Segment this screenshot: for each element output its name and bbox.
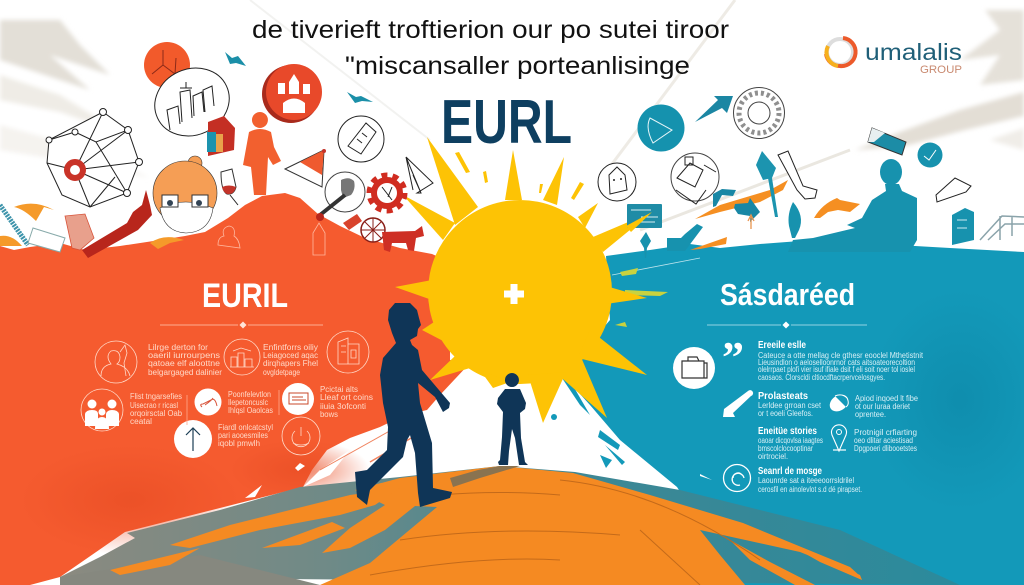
- text block: mouse feature: oprentee.: [855, 410, 886, 419]
- icon: wrench circle: [316, 172, 365, 221]
- icon: group of people: [81, 389, 123, 431]
- icon: two people: [95, 341, 137, 383]
- text block: Prolasteats: [758, 391, 822, 418]
- icon: steel bridge: [980, 216, 1024, 240]
- icon: face tag circle: [598, 163, 636, 201]
- icon: wheel cart: [361, 218, 424, 252]
- heading: EURIL: EURIL: [202, 277, 288, 315]
- icon: books: [207, 116, 235, 156]
- text block two: [263, 343, 318, 377]
- text block one: qatoae elf aloottne: [148, 359, 221, 368]
- icon: tree: [640, 232, 651, 258]
- icon: middle umbrella: [150, 237, 184, 249]
- orange stroke lower: [690, 237, 727, 250]
- logo: GROUP: [920, 64, 962, 76]
- icon: heart circle: [638, 104, 684, 152]
- icon: teal kite: [756, 151, 778, 217]
- icon: white circle with loop: [194, 388, 222, 416]
- text block four: Poonfelevtlon: [228, 390, 271, 399]
- text block five: bows: [320, 410, 338, 419]
- text block: Eneitue stories: oirtrociel.: [758, 452, 788, 461]
- icon: paper tool: [778, 151, 817, 199]
- text block two: ovgldetpage: [263, 368, 300, 377]
- text block five: iiuia 3ofconti: [320, 402, 366, 411]
- arrow: teal pointer: [695, 96, 733, 122]
- text block: Eneitue stories: [758, 426, 823, 461]
- text block four: Ilepetoncuslc: [228, 398, 268, 407]
- icon: document circle: [338, 116, 384, 162]
- icon: wine glass: [221, 169, 238, 205]
- text block: Eneitue stories: Eneitüe stories: [758, 426, 817, 437]
- text block six: iqobl pmwlh: [218, 439, 260, 448]
- column divider two: [278, 390, 280, 415]
- icon: teal arrow: [713, 189, 760, 222]
- text block: pin feature: [854, 428, 917, 453]
- icon: red branch circle: [144, 42, 190, 88]
- small man silhouette: [497, 373, 528, 465]
- text block two: dirqhapers Fhel: [263, 359, 318, 368]
- icon: white circle with arrow: [174, 420, 212, 458]
- icon: power circle: [282, 417, 320, 455]
- icon: gear: [369, 175, 405, 211]
- icon: paper plane: [406, 157, 433, 193]
- icon: skyline medallion: [144, 56, 240, 148]
- text block: Eneitue stories: bmscolclocooptinar: [758, 444, 813, 453]
- orange stroke: [695, 180, 788, 219]
- text block: mouse feature: ot our luraa deriet: [855, 402, 911, 411]
- text block five: Lleaf ort coins: [320, 393, 373, 402]
- icon: triangle flag: [285, 149, 326, 187]
- text block: Prolasteats: Prolasteats: [758, 391, 808, 402]
- icon: outline ticket: [936, 178, 971, 202]
- icon: tilted card: [868, 128, 906, 155]
- icon: quotation marks: ”: [722, 333, 744, 382]
- icon: map pin: [832, 425, 846, 451]
- text block: mouse feature: Apiod inqoed lt fibe: [855, 394, 918, 403]
- text block: first feature: olelrrpaet plofi vier isuf ifiale dsit f eli soit noer tol ioslel: [758, 365, 915, 374]
- text block: Prolasteats: Lerldee grroan cset: [758, 401, 822, 410]
- text block three: Uisecrao r ricasl: [130, 401, 178, 410]
- text block: pin feature: Dpgpoeri dlibooetstes: [854, 444, 917, 453]
- icon: bat two: [347, 92, 373, 103]
- icon: face with bun: [153, 156, 217, 233]
- panel: teal field: [560, 241, 1024, 585]
- icon: castle badge: [262, 64, 322, 123]
- icon: seated man: [788, 159, 917, 252]
- icon: paint brush: [82, 190, 152, 258]
- text block one: [148, 343, 222, 377]
- text block: first feature: [758, 340, 924, 382]
- text block five: Pcictai alts: [320, 385, 358, 394]
- text block: mouse feature: [855, 394, 918, 419]
- doodles: right cluster: [598, 88, 1024, 258]
- icon: left umbrella: [0, 204, 54, 246]
- text block: first feature: caosaos. Clorscldi cltiocdftacrpervcelosgyes.: [758, 373, 885, 382]
- text block: first feature: Cateuce a otte mellag cle gthesr eooclel Mthetistnit: [758, 351, 924, 360]
- icon: white circle with card: [282, 383, 314, 415]
- text block four: [228, 390, 273, 415]
- icon: spiral circle: [724, 464, 750, 492]
- text block three: orqoirsctal Oab: [130, 409, 183, 418]
- text block three: ceatal: [130, 417, 152, 426]
- text block: Eneitue stories: oaoar dicqovlsa iaagtes: [758, 436, 823, 445]
- icon: ticket sketch: [28, 228, 65, 252]
- heading: Sasdareed: Sásdaréed: [720, 277, 855, 312]
- text block three: Flist tngarsefies: [130, 392, 182, 401]
- text block four: Ihlqsl Oaolcas: [228, 406, 273, 415]
- hill with shadows: [60, 466, 960, 585]
- panel: left content: [81, 277, 373, 458]
- text block one: belgargaged dalinier: [148, 368, 222, 377]
- text block: Seanrl de mosge: cerosfil en ainolevlot s.d dé pirapset.: [758, 485, 862, 494]
- text block: pin feature: oeo dlitar aciestisad: [854, 436, 913, 445]
- text block five: [320, 385, 373, 419]
- text block six: pari aooesmiles: [218, 431, 268, 440]
- panel: right content: [673, 277, 924, 494]
- icon: striped building: [65, 214, 94, 250]
- text block: first feature: Ereeile eslle: [758, 340, 806, 351]
- icon: laptop circle: [671, 153, 719, 204]
- logo: [826, 38, 962, 76]
- title: "miscansaller porteanlisinge: [345, 52, 690, 80]
- text block: Seanrl de mosge: Laounrde sat a iteeeoorrsldrilel: [758, 476, 854, 485]
- text block one: oaeril iurrourpens: [148, 351, 220, 360]
- icon: bat one: [225, 52, 246, 66]
- text block two: Enfintforrs oiliy: [263, 343, 318, 352]
- icon: teal building: [952, 208, 974, 245]
- text block: Seanrl de mosge: [758, 466, 862, 494]
- text block two: Leiagoced aqac: [263, 351, 318, 360]
- sun: [395, 137, 652, 423]
- icon: orange fish: [814, 198, 860, 218]
- icon: teal card: [626, 204, 662, 232]
- text block three: [130, 392, 183, 426]
- heading divider: [707, 321, 867, 329]
- text block one: Lilrge derton for: [148, 343, 208, 352]
- icon: teal leaf: [788, 202, 801, 238]
- icon: pencil: [723, 390, 753, 417]
- title: [252, 16, 729, 80]
- plus sign: [504, 284, 524, 304]
- icon: ornate wheel: [734, 88, 784, 138]
- title: de tiverieft troftierion our po sutei tiroor: [252, 16, 729, 44]
- text block: Prolasteats: or t eoeli Gleefos.: [758, 409, 813, 418]
- icon: small arrow: [748, 215, 754, 229]
- column divider one: [186, 395, 188, 425]
- text block six: [218, 423, 273, 448]
- icon: chair: [667, 224, 703, 251]
- icon: mouse: [827, 391, 851, 415]
- doodles: left cluster: [0, 42, 433, 258]
- icon: thinking figure: [243, 112, 281, 195]
- icon: red block: [343, 214, 362, 230]
- text block: first feature: Lieusindlon o aeloselloonrnor cats aitsoateorecoltion: [758, 358, 915, 367]
- icon: lattice mast: [0, 205, 28, 245]
- text block six: Fiardl onlcatcstyl: [218, 423, 273, 432]
- text block: Seanrl de mosge: Seanrl de mosge: [758, 466, 822, 477]
- walking man silhouette: [355, 303, 452, 507]
- logo: umalalis: [865, 39, 962, 65]
- central heading: EURL: [441, 88, 572, 157]
- text block: pin feature: Protnigil crfiarting: [854, 428, 917, 437]
- panel: orange field: [0, 193, 470, 585]
- white brush marks: [295, 372, 712, 480]
- icon: document pair: [327, 331, 369, 373]
- icon: faint hill person: [218, 226, 240, 248]
- icon: faint hill figure: [313, 223, 325, 255]
- icon: clock: [918, 142, 942, 168]
- icon: briefcase circle: [673, 347, 715, 389]
- icon: bar building: [224, 339, 260, 375]
- icon: network diagram: [46, 108, 142, 207]
- heading divider: [160, 321, 323, 329]
